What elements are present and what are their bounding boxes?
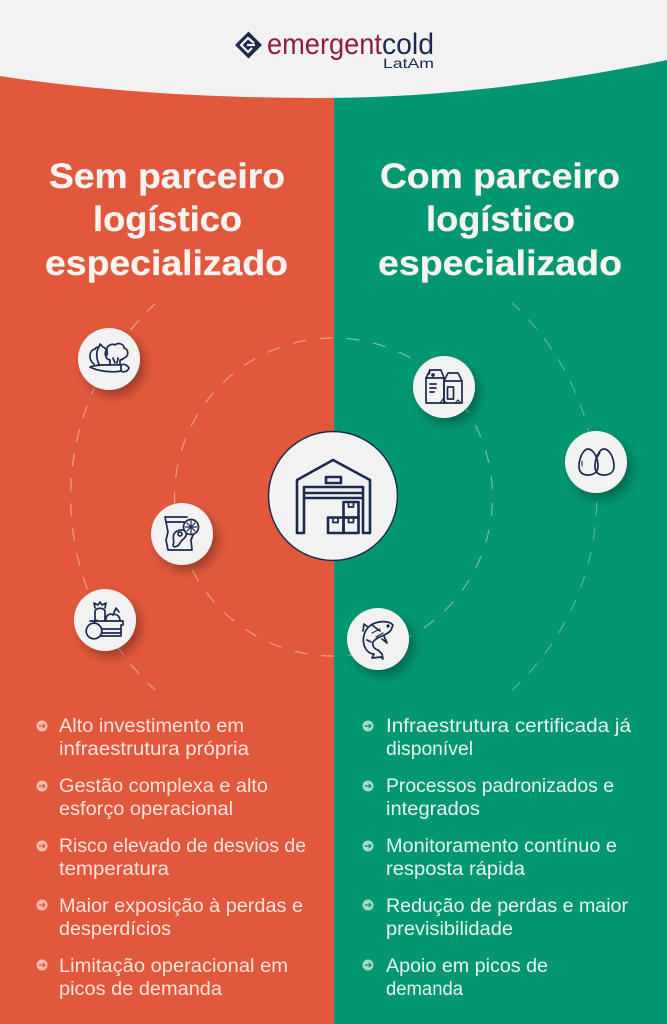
bullet item 5 [36,956,288,1000]
bullet item 4 [362,896,629,940]
icon: central warehouse [268,432,398,560]
bullet item 2: Processos padronizados e [386,776,614,797]
bullet item 1 [36,716,249,760]
heading: sem parceiro [45,157,288,283]
bullet item 4: Redução de perdas e maior [386,896,629,917]
header wave [0,0,667,98]
bullet item 2: Gestão complexa e alto [59,776,268,797]
bullet item 3: Monitoramento contínuo e [386,836,617,857]
panel: com parceiro background [334,60,667,1024]
logo [235,28,434,71]
panel: sem parceiro background [0,60,334,1024]
bullet item 2 [36,776,268,820]
bullet item 4: desperdícios [59,919,171,940]
heading: sem parceiro: Sem parceiro [49,157,285,196]
heading: com parceiro: logístico [426,200,575,239]
heading: com parceiro [378,157,622,283]
bullet item 2: esforço operacional [59,799,233,820]
list: sem parceiro [36,716,306,1000]
icon: frozen meat bag [151,503,213,565]
bullet item 2: integrados [386,799,480,820]
bullet item 4: previsibilidade [386,919,513,940]
bullet item 5: picos de demanda [59,979,222,1000]
icon: logo diamond [235,32,262,58]
bullet item 3: temperatura [59,859,169,880]
bullet item 2 [362,776,614,820]
bullet item 1: Alto investimento em [59,716,244,737]
heading: sem parceiro: logístico [93,200,242,239]
dashed orbits [71,303,597,690]
bullet item 5: Apoio em picos de [386,956,548,977]
bullet item 4 [36,896,303,940]
bullet item 3: Risco elevado de desvios de [59,836,306,857]
icon: vegetables [78,328,140,390]
bullet item 1: disponível [386,739,473,760]
bullet item 1: Infraestrutura certificada já [386,716,631,737]
bullet item 1 [362,716,631,760]
bullet item 3 [362,836,617,880]
icon: fruit crate [74,589,136,651]
bullet item 3: resposta rápida [386,859,525,880]
list: com parceiro [362,716,631,1000]
logo wordmark: emergent [267,28,382,61]
icon: milk cartons [413,356,475,418]
bullet item 5: demanda [386,979,463,1000]
heading: com parceiro: Com parceiro [380,157,620,196]
icon: fish [347,608,409,670]
bullet item 5 [362,956,548,1000]
bullet item 5: Limitação operacional em [59,956,288,977]
icon: eggs [565,431,627,493]
heading: sem parceiro: especializado [45,244,288,283]
logo subtitle: LatAm [383,55,434,71]
bullet item 3 [36,836,306,880]
logo wordmark end: cold [382,28,434,61]
bullet item 4: Maior exposição à perdas e [59,896,303,917]
bullet item 1: infraestrutura própria [59,739,249,760]
heading: com parceiro: especializado [378,244,622,283]
